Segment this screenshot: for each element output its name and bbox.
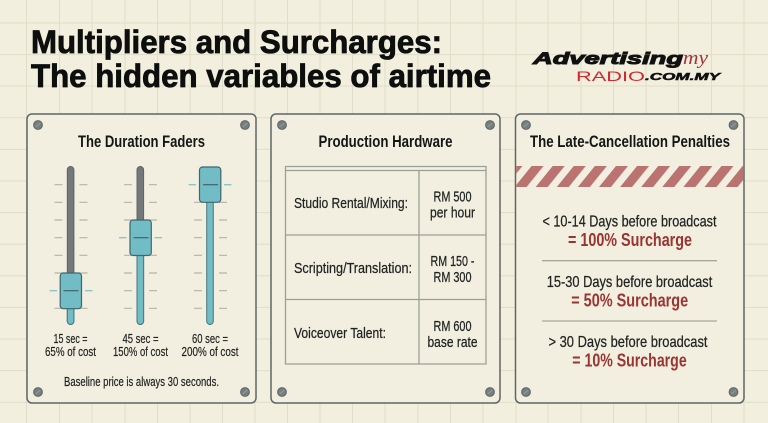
row: voiceover: base rate [428, 334, 478, 351]
label: 15 sec [45, 331, 96, 359]
label: 60 sec: 60 sec = [192, 331, 228, 346]
penalty: 15-30 days: = 50% Surcharge [571, 291, 688, 311]
penalty: under 14 days [542, 214, 717, 250]
hazard stripe band [516, 166, 743, 187]
logo: Advertising my Radio: my [683, 48, 709, 69]
row: scripting: Scripting/Translation: [294, 260, 412, 277]
row: voiceover [294, 318, 478, 351]
price table [286, 166, 486, 364]
row: studio rental [294, 189, 475, 222]
panel: production hardware [271, 114, 500, 403]
label: 45 sec: 45 sec = [122, 331, 158, 346]
penalty: under 14 days: = 100% Surcharge [568, 230, 692, 250]
penalty: over 30 days [548, 334, 708, 371]
row: scripting: RM 300 [434, 269, 472, 286]
fader: 60 sec [188, 167, 232, 324]
row: scripting [294, 253, 475, 286]
row: studio rental: RM 500 [434, 189, 472, 206]
penalty: under 14 days: < 10-14 Days before broadcast [542, 214, 717, 231]
label: 60 sec: 200% of cost [182, 344, 239, 359]
penalty: over 30 days: > 30 Days before broadcast [548, 334, 708, 351]
panel: late-cancellation penalties [516, 114, 744, 403]
logo: Advertising my Radio: RADIO [576, 68, 645, 84]
title: Multipliers and Surcharges: [31, 24, 442, 60]
logo: Advertising my Radio [531, 48, 722, 84]
row: voiceover: RM 600 [434, 318, 472, 335]
penalty: 15-30 days: 15-30 Days before broadcast [547, 274, 713, 291]
row: voiceover: Voiceover Talent: [294, 325, 386, 342]
row: studio rental: Studio Rental/Mixing: [294, 195, 408, 212]
title [31, 24, 491, 94]
fader: 45 sec [119, 166, 162, 324]
label: 15 sec: 15 sec = [54, 331, 88, 346]
penalty: 15-30 days [547, 274, 713, 311]
panel: the duration faders [27, 114, 256, 403]
label: 15 sec: 65% of cost [45, 344, 96, 359]
label: 45 sec: 150% of cost [113, 344, 168, 359]
note: baseline price: Baseline price is always 30 seconds. [64, 374, 219, 389]
penalty: over 30 days: = 10% Surcharge [572, 351, 687, 371]
label: 60 sec [182, 331, 239, 359]
fader: 15 sec [50, 166, 92, 324]
label: 45 sec [113, 331, 168, 359]
heading: production hardware: Production Hardware [318, 132, 452, 151]
logo: Advertising my Radio: Advertising [531, 49, 684, 68]
logo: Advertising my Radio: .COM.MY [645, 72, 722, 83]
title: The hidden variables of airtime [31, 58, 491, 94]
heading: the duration faders: The Duration Faders [78, 132, 205, 151]
row: studio rental: per hour [430, 205, 475, 222]
row: scripting: RM 150 - [430, 253, 475, 270]
